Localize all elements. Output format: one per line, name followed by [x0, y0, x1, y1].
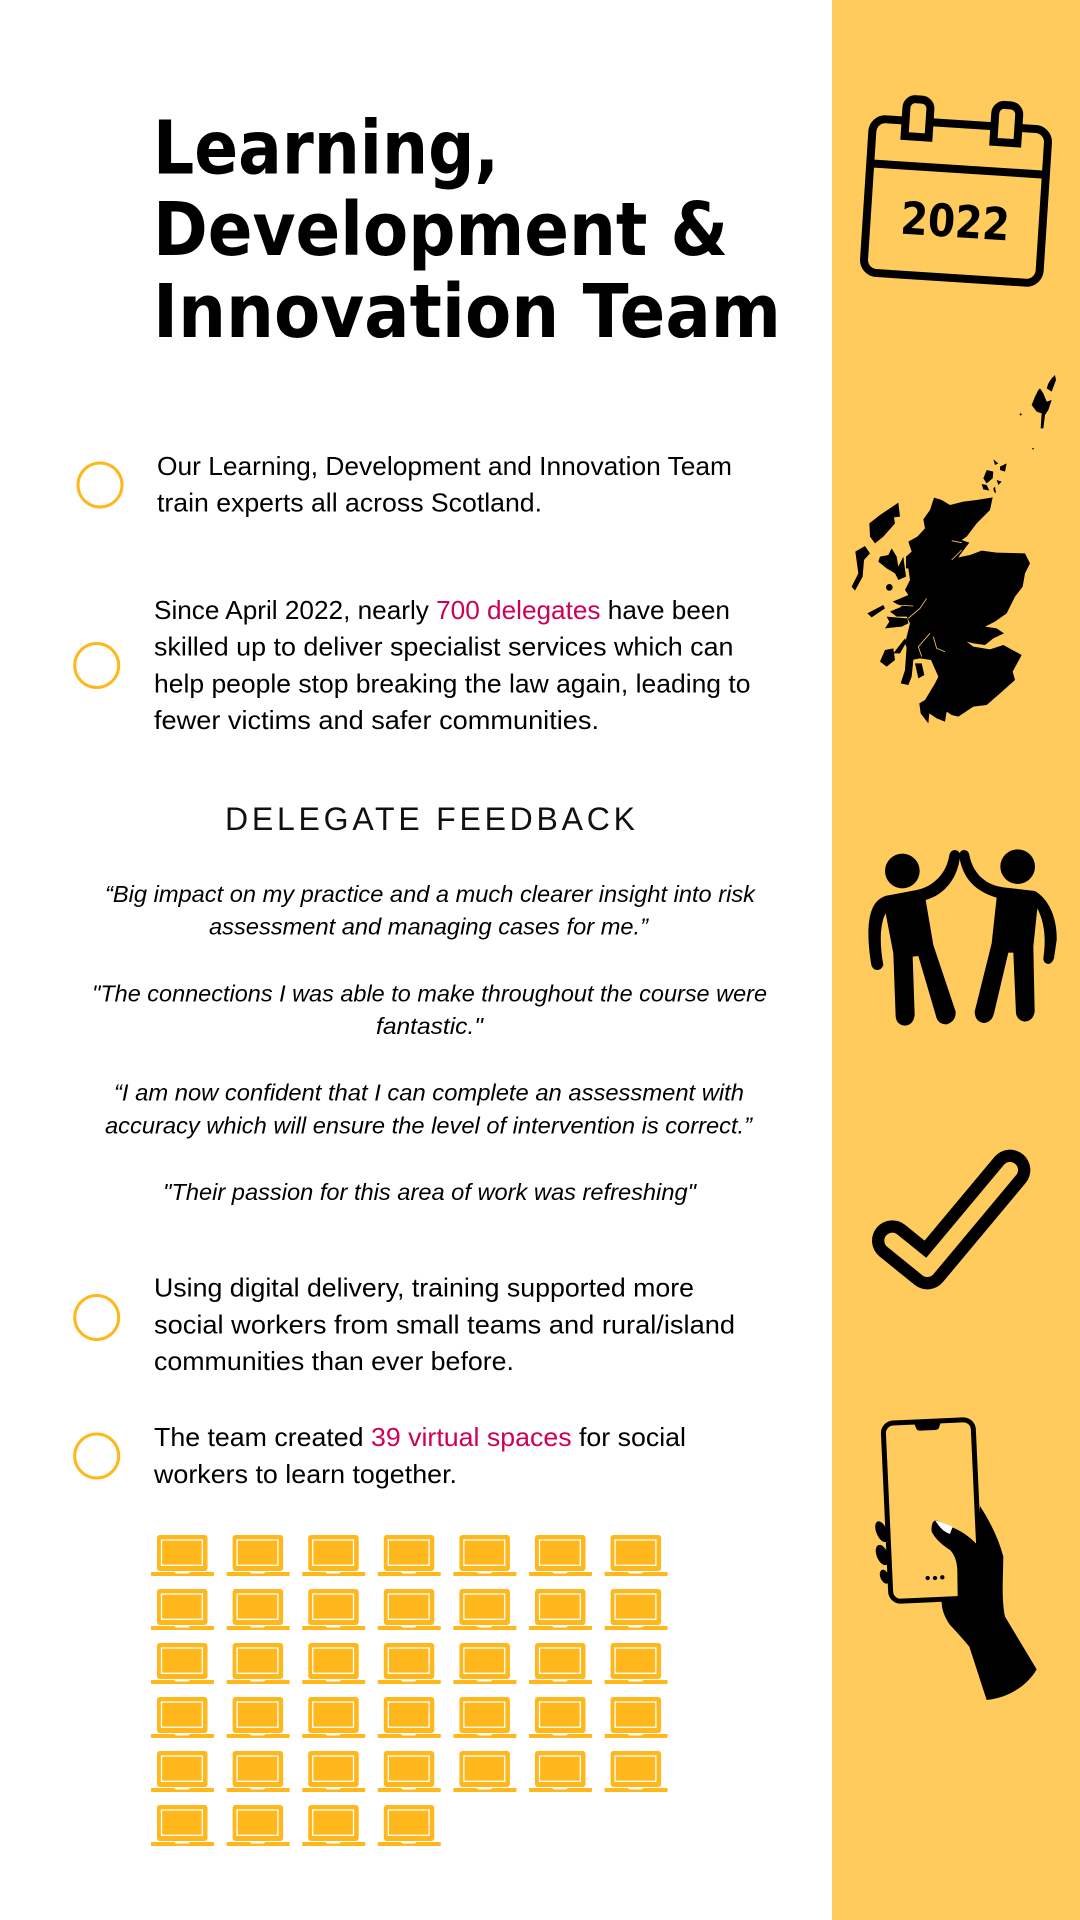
icon: bullet circle 3 [75, 1296, 119, 1340]
heading: delegate feedback: DELEGATE FEEDBACK [225, 801, 635, 837]
text block: 39 virtual spaces: The team created 39 virtual spaces for social [154, 1422, 686, 1452]
icon grid: 39 laptops [151, 1535, 668, 1846]
title: Innovation Team [153, 269, 781, 355]
text block: 700 delegates [154, 595, 750, 735]
text block: digital delivery: Using digital delivery, training supported more [154, 1273, 694, 1303]
icon: two people high-fiving [868, 849, 1057, 1026]
text block: delegate quotes: "Their passion for this area of work was refreshing" [163, 1179, 698, 1205]
title: Development & [153, 187, 728, 273]
icon: bullet circle 4 [75, 1434, 119, 1478]
text block: delegate quotes: assessment and managing cases for me.” [209, 914, 649, 940]
text block: digital delivery [154, 1273, 735, 1376]
title [153, 106, 781, 355]
text block: delegate quotes: "The connections I was able to make throughout the course were [92, 980, 767, 1006]
text block: digital delivery: communities than ever before. [154, 1346, 514, 1376]
text block: 700 delegates: skilled up to deliver specialist services which can [154, 632, 734, 662]
text block: delegate quotes [92, 881, 767, 1205]
icon: check mark [892, 1170, 1010, 1269]
text block: 700 delegates: Since April 2022, nearly 700 delegates have been [154, 595, 730, 625]
text block: team intro: Our Learning, Development and Innovation Team [157, 451, 732, 481]
text block: delegate quotes: accuracy which will ensure the level of intervention is correct.” [105, 1112, 753, 1138]
text block: team intro [157, 451, 732, 518]
text block: delegate quotes: “I am now confident that I can complete an assessment with [114, 1080, 744, 1106]
icon: calendar 2022: 2022 [899, 192, 1011, 251]
text block: 39 virtual spaces [153, 1422, 686, 1489]
text block: delegate quotes: “Big impact on my practice and a much clearer insight into risk [105, 881, 756, 907]
icon: bullet circle 2 [75, 644, 119, 688]
text block: 700 delegates: fewer victims and safer communities. [154, 705, 599, 735]
icon: map of Scotland [852, 375, 1056, 723]
text block: digital delivery: social workers from small teams and rural/island [154, 1310, 735, 1340]
icon: calendar 2022 [863, 97, 1050, 284]
panel: yellow sidebar [832, 0, 1080, 1920]
icon: bullet circle 1 [78, 463, 122, 507]
text block: 39 virtual spaces: workers to learn together. [153, 1459, 457, 1489]
title: Learning, [153, 106, 499, 192]
text block: team intro: train experts all across Scotland. [157, 488, 542, 518]
icon: hand holding phone [873, 1419, 1037, 1700]
text block: delegate quotes: fantastic." [376, 1013, 485, 1039]
text block: 700 delegates: help people stop breaking the law again, leading to [154, 668, 750, 698]
